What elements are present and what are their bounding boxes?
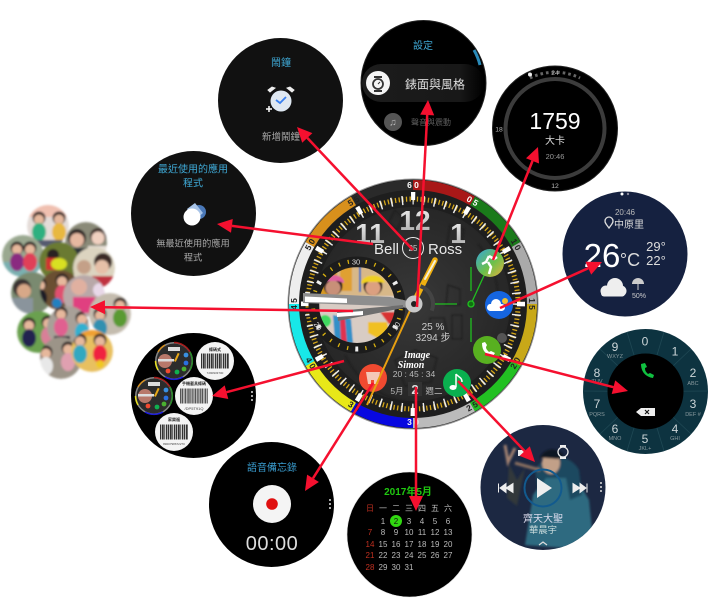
dial pad digits: 1: [672, 344, 679, 358]
bezel numbers: 5 0: [303, 237, 317, 252]
icon: barcode shortcut: [359, 364, 387, 392]
calendar grid: 27: [444, 551, 453, 560]
calendar grid: 14: [366, 540, 375, 549]
bezel numbers: 1 0: [509, 237, 523, 252]
panel: calories: [492, 66, 618, 191]
arrow: music: [458, 381, 535, 462]
brand logo: Simon: [398, 360, 425, 371]
calories scale labels: [495, 70, 559, 190]
bezel numbers: 2 5: [464, 399, 480, 413]
photo circle 5: [73, 247, 115, 289]
calendar grid: 18: [418, 540, 427, 549]
calories scale labels: 18: [495, 126, 503, 134]
dial pad digits: 8: [594, 366, 601, 380]
options dots: [600, 482, 602, 492]
bezel numbers: [289, 180, 537, 427]
panel: barcodes: [131, 333, 256, 458]
panel: music player: [480, 425, 606, 550]
barcode card 2: 手機載具條碼: [182, 380, 206, 386]
calendar grid: 一: [379, 504, 387, 513]
rain chance: 50%: [632, 293, 646, 300]
dial pad digits: 4: [672, 422, 679, 436]
bezel numbers: 6 0: [407, 180, 419, 190]
date row: 5月: [390, 386, 404, 396]
scroll indicator: [474, 50, 480, 65]
arrow: dial pad: [485, 354, 628, 394]
minute ticks: [305, 196, 521, 412]
arrow: recent apps: [217, 219, 373, 244]
icon: cloud: [600, 278, 626, 296]
current temperature: 26: [584, 237, 620, 274]
icon: alarm clock: [266, 87, 294, 112]
calendar grid: 1: [381, 517, 386, 526]
main watch face: [288, 178, 538, 430]
high and low temperature: 22°: [646, 253, 666, 268]
bezel numbers: 3 5: [346, 399, 362, 414]
dial texture: [345, 210, 498, 403]
dial pad digits: 7: [594, 397, 601, 411]
panel: weather: [562, 192, 688, 316]
calendar grid: 11: [418, 528, 427, 537]
icon: call: [641, 363, 654, 378]
hour numeral 12: 12: [399, 205, 431, 236]
date row: [390, 382, 443, 397]
chevron up: [539, 542, 547, 545]
photo circle 3: [2, 235, 44, 278]
song title: 齊天大聖: [523, 512, 563, 525]
calendar grid: 21: [366, 551, 375, 560]
calendar heading: 2017年5月: [384, 485, 432, 498]
icon: umbrella: [632, 278, 644, 290]
dial pad digits: 5: [642, 432, 649, 446]
sub dial numbers: 30: [352, 258, 360, 266]
calendar grid: 7: [368, 528, 373, 537]
calendar grid: 六: [444, 503, 452, 513]
step counter: 3294 步: [415, 332, 451, 344]
calendar grid: [366, 503, 453, 572]
settings heading: 設定: [413, 39, 433, 52]
barcode card 3: 8900798672270: [163, 442, 185, 446]
dial center: [316, 207, 510, 401]
bezel numbers: 5 5: [346, 194, 361, 208]
recent apps message: 程式: [184, 252, 202, 262]
calendar grid: 四: [418, 504, 426, 513]
weather time: 20:46: [615, 208, 636, 217]
calendar grid: 6: [446, 517, 451, 526]
dial pad digits: 3: [690, 397, 697, 411]
calendar grid: 2: [394, 517, 399, 526]
settings row: sound: 聲音與震動: [411, 117, 451, 127]
barcode card 2: /DP5T91Q: [185, 406, 203, 411]
calendar grid: 28: [366, 563, 375, 572]
brand logo: Image: [403, 350, 431, 361]
dial pad digits: 6: [612, 422, 619, 436]
calories progress ring: [506, 79, 604, 178]
dial pad dividers: [583, 332, 708, 451]
icon: activity: [476, 249, 504, 277]
alarm heading: 鬧鐘: [271, 56, 291, 69]
second silver hand: [337, 305, 403, 321]
photo circle 7: [38, 270, 76, 311]
calories time: 20:46: [546, 152, 564, 161]
icon: toggle cards: [184, 203, 206, 226]
photo circle 8: [63, 275, 107, 317]
options dots: [329, 499, 331, 509]
arrow: calories: [493, 147, 539, 260]
calendar grid: 20: [444, 540, 453, 549]
bezel numbers: 1 5: [527, 298, 537, 310]
gray dot: [497, 333, 507, 343]
sub dial with photo: [308, 256, 406, 354]
mini watch face 1: [155, 342, 193, 380]
icon: phone: [473, 336, 501, 364]
dial pad letters: [589, 354, 702, 452]
alarm label: 新增鬧鐘: [262, 131, 300, 143]
options dots: [251, 391, 253, 401]
bezel numbers: 4 0: [304, 355, 318, 371]
temperature unit: °C: [620, 250, 640, 270]
dial pad letters: MNO: [609, 436, 622, 442]
play button: [524, 470, 562, 506]
panel: photo collage: [2, 205, 131, 379]
calendar grid: 3: [407, 517, 412, 526]
sub dial numbers: 20: [312, 320, 324, 332]
photo circle 4: [39, 242, 79, 282]
previous button: [498, 484, 513, 492]
panel: recent apps: [131, 151, 256, 276]
weather location: 中原里: [614, 218, 644, 231]
calendar grid: 24: [405, 551, 414, 560]
panel: voice memo: [209, 442, 334, 567]
dial pad letters: WXYZ: [607, 354, 624, 360]
seconds hand: [367, 304, 413, 405]
calendar grid: 29: [379, 563, 388, 572]
calendar grid: 19: [431, 540, 440, 549]
recent apps message: 無最近使用的應用: [156, 238, 230, 248]
calendar grid: 25: [418, 551, 427, 560]
calendar grid: 23: [392, 551, 401, 560]
calories value: 1759: [529, 108, 581, 134]
minute hand silver: [303, 293, 408, 308]
step counter: [415, 322, 451, 344]
today marker: [390, 515, 402, 527]
arrow: alarm: [297, 127, 413, 250]
progress dots: [528, 72, 580, 78]
mini watch face 2: [135, 377, 173, 415]
center hub: [390, 280, 438, 328]
photo circle 9: [89, 293, 131, 337]
panel: calendar: [347, 472, 472, 597]
bezel numbers: 3 0: [407, 417, 419, 427]
arrow: voice memo: [305, 383, 373, 491]
high and low temperature: [646, 239, 666, 268]
sub dial numbers: 10: [390, 320, 402, 332]
photo circle 13: [39, 337, 82, 379]
calendar grid: 12: [431, 528, 440, 537]
icon: weather: [485, 291, 513, 319]
calendar grid: 五: [431, 504, 439, 513]
photo circle 11: [47, 306, 89, 348]
calendar grid: 15: [379, 540, 388, 549]
weather page dots: [620, 192, 629, 196]
dial pad letters: TUV: [592, 379, 603, 385]
calendar grid: 日: [366, 504, 374, 513]
hour numeral 11: 11: [355, 218, 385, 249]
dial pad center: [608, 354, 684, 430]
dial pad digits: 2: [690, 366, 697, 380]
settings row: sound: [384, 113, 451, 131]
dial pad digits: 9: [612, 340, 619, 354]
icon: phone small: [518, 450, 524, 456]
barcode card 3: [155, 413, 193, 451]
brand text: Bell: [374, 241, 399, 258]
icon: music: [443, 369, 471, 397]
sub dial numbers: [312, 257, 402, 332]
arrow: weather: [500, 262, 602, 308]
step counter: 25 %: [422, 322, 445, 333]
bezel numbers: 2 0: [508, 355, 523, 371]
hour hand gold: [415, 260, 435, 300]
dial pad letters: ABC: [687, 381, 699, 387]
dial pad digits: 0: [642, 334, 649, 348]
calendar grid: 4: [420, 517, 425, 526]
calendar grid: 5: [433, 517, 438, 526]
panel: settings: [361, 20, 486, 146]
dial pad letters: PQRS: [589, 412, 605, 418]
recent apps heading: 最近使用的應用: [158, 162, 228, 176]
hands: [303, 260, 438, 405]
calendar grid: 三: [405, 504, 413, 513]
barcode card 3: 家樂福: [168, 416, 180, 422]
arrow: calendar: [409, 387, 423, 511]
settings row: watch faces: 錶面與風格: [405, 76, 465, 92]
photo circle 6: [11, 272, 53, 316]
dial pad digits: [594, 334, 697, 446]
next button: [573, 484, 587, 492]
bezel numbers: 0 5: [465, 194, 480, 208]
album artwork: [505, 445, 594, 550]
icon: watch: [558, 446, 568, 458]
calendar grid: 16: [392, 540, 401, 549]
arrow: photos: [90, 300, 353, 314]
barcode card 1: [196, 342, 234, 380]
settings row: sound: ♫: [389, 118, 397, 128]
green mini dial: [433, 267, 487, 342]
arrow: settings: [417, 100, 434, 307]
calories unit: 大卡: [545, 134, 565, 147]
digital time: 20 : 45 : 34: [393, 369, 436, 379]
dial pad letters: GHI: [670, 436, 680, 442]
recent apps heading: 程式: [183, 176, 203, 190]
panel: alarm: [218, 38, 343, 163]
brand text: [374, 238, 462, 258]
voice memo heading: 語音備忘錄: [247, 461, 297, 474]
calendar grid: 22: [379, 551, 388, 560]
artist name: 華晨宇: [529, 524, 557, 535]
calories scale labels: 24: [551, 70, 559, 77]
calendar grid: 二: [392, 504, 400, 513]
calories scale labels: 12: [551, 183, 559, 190]
date row: 週二: [425, 386, 443, 396]
record button: [253, 485, 291, 523]
panel: dial pad: [583, 329, 708, 454]
arrow: barcodes: [212, 361, 344, 399]
calendar grid: 26: [431, 551, 440, 560]
calendar grid: 13: [444, 528, 453, 537]
icon: backspace: [636, 408, 655, 416]
arrows: [90, 100, 628, 511]
calendar grid: 17: [405, 540, 414, 549]
dial pad letters: DEF #: [685, 412, 702, 418]
brand text: 25: [409, 244, 418, 253]
barcode card 1: 7290933700: [207, 371, 224, 375]
timer: 00:00: [246, 533, 298, 555]
dial pad letters: JKL+: [639, 446, 651, 452]
high and low temperature: 29°: [646, 239, 666, 254]
barcode card 1: 條碼式: [209, 346, 221, 352]
photo circle 12: [71, 330, 113, 372]
brand text: Ross: [428, 241, 462, 258]
calendar grid: 9: [394, 528, 399, 537]
colored bezel ring: [250, 141, 576, 467]
photo circle 1: [27, 205, 69, 248]
photo circle 10: [17, 311, 59, 353]
outer rim: [288, 179, 538, 429]
bezel numbers: 4 5: [289, 298, 299, 310]
calendar grid: 8: [381, 528, 386, 537]
calendar grid: 31: [405, 563, 414, 572]
sub dial photo: [319, 267, 395, 344]
hour numeral 1: 1: [450, 218, 466, 249]
photo circle 2: [64, 220, 108, 256]
calendar grid: 30: [392, 563, 401, 572]
barcode card 2: [175, 377, 213, 415]
calendar grid: 10: [405, 528, 414, 537]
date row: 2: [411, 382, 419, 397]
